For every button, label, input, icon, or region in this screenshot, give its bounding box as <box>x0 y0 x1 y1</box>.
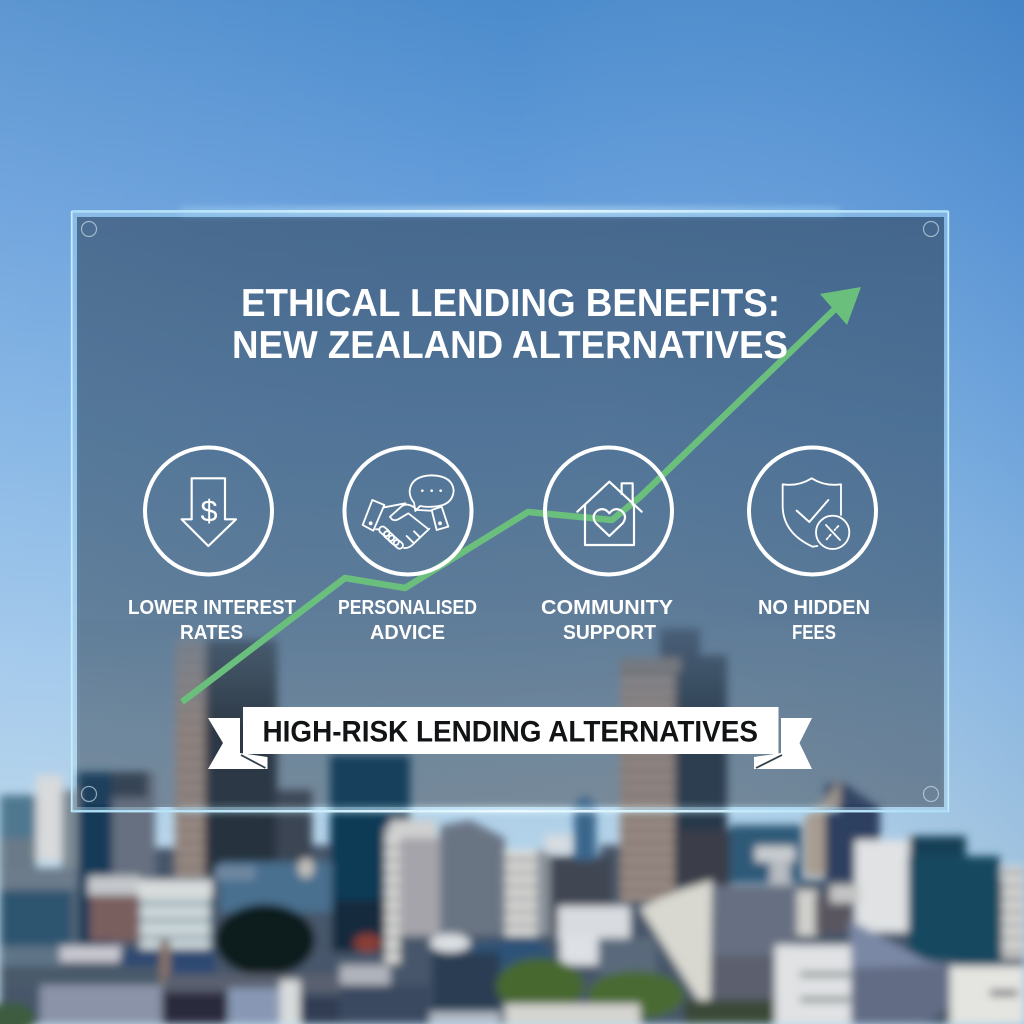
icon: down arrow with dollar <box>182 478 236 546</box>
icon: handshake with speech bubble <box>363 475 454 550</box>
benefit: lower interest rates: LOWER INTEREST <box>128 597 296 619</box>
benefit: lower interest rates <box>128 448 296 644</box>
icon: down arrow with dollar: $ <box>200 494 218 528</box>
benefit: community support: SUPPORT <box>563 622 656 644</box>
benefit: no hidden fees: FEES <box>792 622 836 644</box>
icon: shield with check and crossed percent <box>783 478 849 549</box>
benefit: community support <box>541 448 674 644</box>
benefit: no hidden fees <box>749 448 876 644</box>
benefit: personalised advice: ADVICE <box>370 622 445 644</box>
benefit: personalised advice: PERSONALISED <box>338 597 477 619</box>
banner ribbon: HIGH-RISK LENDING ALTERNATIVES <box>262 716 758 748</box>
panel: glass frame <box>71 209 949 812</box>
benefit: personalised advice <box>338 448 477 644</box>
corner screws <box>82 222 938 802</box>
title: NEW ZEALAND ALTERNATIVES <box>232 324 788 367</box>
benefit: community support: COMMUNITY <box>541 597 674 619</box>
background: blurred city skyline <box>0 628 1024 1024</box>
title: ETHICAL LENDING BENEFITS: <box>241 282 780 325</box>
banner ribbon <box>208 707 812 769</box>
icon: house with heart <box>577 482 642 545</box>
growth arrow <box>182 287 861 702</box>
benefit: lower interest rates: RATES <box>180 622 243 644</box>
title <box>232 282 788 367</box>
benefit: no hidden fees: NO HIDDEN <box>758 597 870 619</box>
panel: glass card fill <box>77 217 944 807</box>
